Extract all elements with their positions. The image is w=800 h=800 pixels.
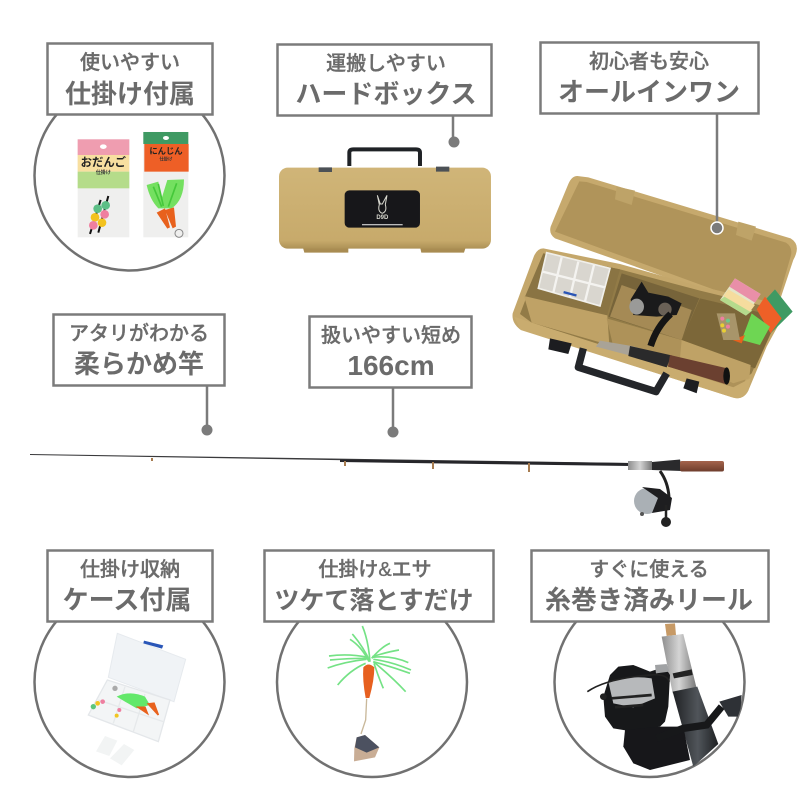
reel in box	[629, 282, 682, 346]
circle: tackle case	[34, 587, 224, 777]
label: short length: 166cm	[347, 350, 435, 381]
photo: closed hard box	[279, 149, 491, 253]
rod butt	[662, 623, 718, 767]
photo: clear tackle case	[88, 633, 186, 765]
label: short length: 扱いやすい短め	[321, 324, 461, 347]
rod handle in box	[596, 341, 730, 385]
label: hard box	[278, 44, 492, 116]
circle: reel close-up	[554, 587, 744, 777]
marker dot: short length	[388, 426, 398, 438]
box handle and clasps	[548, 338, 699, 393]
rod blank	[30, 454, 630, 472]
pack: carrot tackle: にんじん	[149, 146, 183, 156]
lid	[550, 176, 797, 310]
carrot body	[363, 664, 374, 698]
panel: tackle case	[34, 550, 224, 777]
base	[512, 248, 787, 398]
label: hard box: ハードボックス	[295, 79, 477, 109]
label: all in one: オールインワン	[558, 77, 740, 107]
pack: dango tackle: 仕掛け	[96, 169, 111, 176]
label: short length	[310, 316, 472, 388]
pack: dango tackle: おだんご	[81, 155, 127, 169]
photo: carrot rig with bait	[328, 626, 411, 761]
label: reel with line: すぐに使える	[589, 558, 709, 581]
marker dot: soft rod	[202, 424, 212, 436]
label: just attach bait: ツケて落とすだけ	[274, 587, 474, 615]
label: tackle case: 仕掛け収納	[80, 558, 180, 581]
label: just attach bait: 仕掛け&エサ	[318, 558, 432, 581]
rod handle	[628, 460, 724, 472]
pack: carrot tackle: 仕掛け	[159, 156, 172, 163]
box black plate: D9D	[376, 215, 389, 221]
box black plate	[345, 190, 420, 228]
label: tackle case: ケース付属	[63, 585, 191, 615]
spare clear bags	[96, 736, 134, 765]
label: tackle included	[48, 44, 212, 114]
label: reel with line: 糸巻き済みリール	[545, 585, 753, 615]
photo: open box with contents	[512, 176, 797, 398]
circle: tackle packs	[34, 80, 224, 270]
line and swivel	[361, 699, 367, 734]
box body	[279, 168, 491, 249]
panel: just attach bait	[264, 550, 494, 777]
front rim	[514, 317, 751, 398]
label: tackle included: 仕掛け付属	[65, 79, 195, 109]
reel crank arm	[676, 695, 742, 732]
label: all in one	[540, 42, 758, 114]
panel: fishing rod	[30, 314, 724, 527]
reel	[634, 471, 672, 527]
reel body	[587, 664, 670, 732]
case lid	[108, 633, 186, 702]
green tassel	[328, 626, 411, 692]
case contents	[91, 686, 158, 718]
marker dot: all in one	[711, 222, 723, 234]
label: tackle case	[48, 550, 212, 622]
circle: carrot rig	[277, 587, 467, 777]
panel: hard box	[278, 44, 492, 253]
pack: carrot tackle	[143, 132, 189, 237]
label: soft rod: アタリがわかる	[69, 322, 209, 345]
label: all in one: 初心者も安心	[589, 50, 709, 73]
label: hard box: 運搬しやすい	[326, 52, 446, 75]
panel: reel with line	[532, 550, 768, 777]
leader line: all in one	[716, 112, 718, 226]
label: soft rod: 柔らかめ竿	[74, 349, 204, 379]
reel rotor and foot	[623, 727, 690, 770]
photo: tackle packs	[78, 132, 189, 237]
marker dot: hard box	[448, 136, 460, 148]
bait chunk	[354, 735, 379, 761]
label: tackle included: 使いやすい	[80, 51, 180, 74]
box clasps	[319, 167, 449, 172]
label: just attach bait	[264, 550, 494, 622]
label: reel with line	[532, 550, 768, 622]
panel: all in one	[512, 42, 797, 398]
box handle	[349, 149, 420, 166]
clear parts case	[538, 253, 610, 306]
case latch	[143, 641, 163, 649]
box feet	[303, 247, 466, 253]
leader line: short length	[392, 387, 394, 432]
photo: reel close-up	[587, 623, 742, 770]
small tackle packs	[717, 278, 793, 345]
panel: tackle included	[34, 44, 224, 270]
leader line: soft rod	[206, 384, 208, 430]
leader line: hard box	[452, 114, 454, 142]
case tray	[88, 680, 170, 742]
label: soft rod	[54, 314, 224, 386]
pack: dango tackle	[78, 139, 129, 237]
